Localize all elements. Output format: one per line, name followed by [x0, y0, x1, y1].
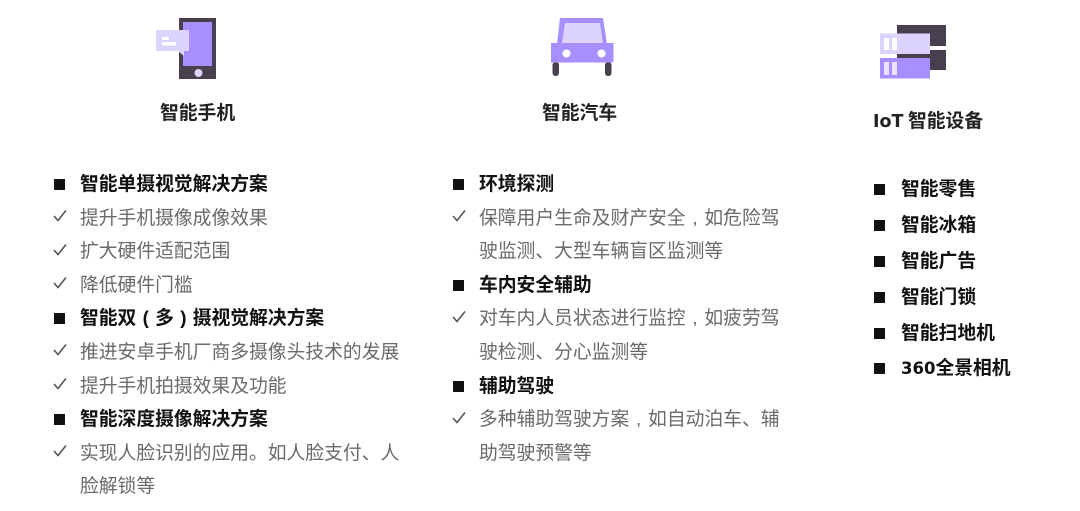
item: face recognition: 实现人脸识别的应用。如人脸支付、人 — [80, 442, 399, 463]
item: depth camera solution: 智能深度摄像解决方案 — [80, 408, 268, 429]
item: multi camera solution: ( — [143, 307, 149, 328]
item: 360 camera: 360全景相机 — [901, 357, 1011, 378]
heading: smart car: 智能汽车 — [542, 102, 617, 123]
item: driving solutions: 多种辅助驾驶方案 如自动泊车、辅 — [479, 408, 780, 429]
item: safety: 保障用户生命及财产安全 如危险驾 — [479, 207, 780, 228]
item: driving solutions continued: 助驾驶预警等 — [479, 442, 592, 463]
item: smart fridge: 智能冰箱 — [901, 214, 976, 235]
bullet: assisted driving — [453, 381, 464, 392]
check mark — [452, 412, 466, 424]
item: occupant monitoring: 对车内人员状态进行监控 如疲劳驾 — [479, 307, 780, 328]
item: safety continued: 驶监测、大型车辆盲区监测等 — [479, 240, 723, 261]
item: multi camera solution: 智能双 多 摄视觉解决方案 — [80, 307, 324, 328]
item: robot vacuum: 智能扫地机 — [901, 322, 995, 343]
check mark — [452, 311, 466, 323]
item: environment detection: 环境探测 — [479, 173, 554, 194]
panel: IoT list — [874, 178, 1011, 378]
item: android multi-camera: 推进安卓手机厂商多摄像头技术的发展 — [80, 341, 399, 362]
bullet: in-car — [453, 280, 464, 290]
bullet: fridge — [874, 220, 885, 230]
check mark — [54, 277, 66, 289]
bullet: depth camera — [54, 414, 65, 424]
bullet: vacuum — [874, 328, 885, 338]
heading: smartphone: 智能手机 — [160, 102, 235, 123]
item: smart retail: 智能零售 — [901, 178, 976, 199]
heading: IoT smart devices: 智能设备 — [908, 110, 983, 131]
bullet: environment — [453, 179, 464, 190]
item: multi camera solution: ) — [180, 307, 186, 328]
heading: IoT smart devices — [873, 110, 983, 132]
heading: IoT smart devices: IoT — [873, 112, 903, 132]
check mark — [54, 210, 66, 222]
bullet: ads — [874, 256, 885, 266]
item: photo effects: 提升手机拍摄效果及功能 — [80, 375, 287, 396]
icon: IoT device stack — [880, 25, 946, 78]
check mark — [54, 344, 66, 356]
bullet: camera — [874, 363, 885, 374]
bullet: multi camera — [54, 313, 65, 324]
check mark — [54, 244, 66, 256]
item: in-car safety assist: 车内安全辅助 — [479, 274, 592, 295]
item: smart ads: 智能广告 — [901, 250, 976, 271]
item: expand hardware: 扩大硬件适配范围 — [80, 240, 230, 261]
icon: smartphone with chat bubble — [156, 18, 216, 79]
panel: smart car list — [452, 173, 780, 463]
bullet: single camera — [54, 179, 65, 190]
item: smart lock: 智能门锁 — [901, 286, 976, 307]
bullet: retail — [874, 184, 885, 194]
item: safety: , — [692, 207, 698, 228]
item: occupant monitoring: , — [692, 307, 698, 328]
panel: smartphone list — [54, 173, 399, 496]
item: face recognition continued: 脸解锁等 — [80, 475, 155, 496]
bullet: lock — [874, 292, 885, 302]
item: assisted driving: 辅助驾驶 — [479, 375, 554, 396]
item: driving solutions: , — [636, 408, 641, 429]
item: improve imaging: 提升手机摄像成像效果 — [80, 207, 268, 228]
item: occupant monitoring continued: 驶检测、分心监测等 — [479, 341, 648, 362]
item: reduce threshold: 降低硬件门槛 — [80, 274, 193, 295]
check mark — [452, 210, 466, 222]
item: single camera solution: 智能单摄视觉解决方案 — [80, 173, 268, 194]
icon: car — [551, 18, 614, 76]
check mark — [54, 445, 66, 457]
check mark — [54, 378, 66, 390]
